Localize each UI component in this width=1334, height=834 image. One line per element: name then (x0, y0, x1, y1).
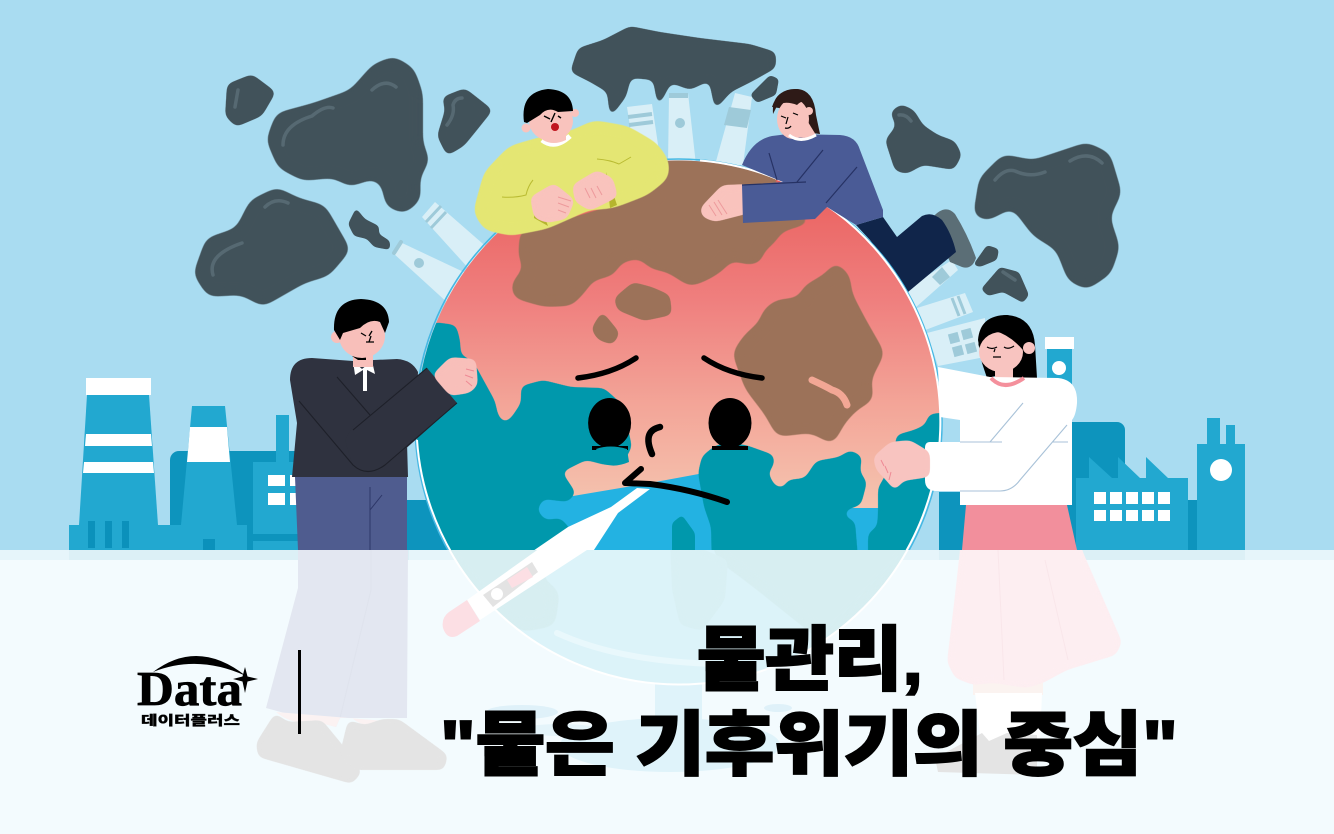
logo arc (153, 656, 246, 676)
logo: Data Plus (137, 656, 258, 728)
collar (353, 361, 375, 391)
mouth (625, 469, 727, 502)
legs (295, 477, 407, 550)
eyes (588, 398, 752, 449)
head (331, 299, 389, 367)
divider line (298, 650, 301, 734)
right factories (939, 337, 1245, 550)
nose (648, 427, 660, 454)
faded skirt, legs and shoes of woman (936, 550, 1120, 774)
teal under eyes (596, 446, 629, 466)
sick face on the globe (578, 358, 762, 466)
hand (432, 357, 478, 396)
skirt (962, 505, 1077, 550)
logo star (233, 667, 258, 693)
smoke clouds (193, 26, 1122, 307)
head (772, 89, 820, 140)
faded globe lower half (448, 550, 908, 686)
logo wordmark: Data (137, 661, 242, 716)
person in yellow sweater (473, 89, 669, 236)
thermometer upper part (530, 488, 650, 553)
faded lower band (0, 550, 1334, 834)
sleeve (925, 420, 1072, 491)
neck and face (978, 315, 1035, 390)
woman on the right (873, 315, 1077, 550)
head (522, 89, 579, 144)
eyebrows (578, 358, 762, 378)
left factories (69, 378, 460, 550)
faded stand and base of globe (486, 680, 792, 772)
logo Korean wordmark: 데이터플러스 (141, 713, 240, 728)
sweater (938, 367, 1077, 505)
back hair (978, 315, 1037, 387)
title line 1: 물관리, (697, 621, 923, 699)
hand (873, 440, 930, 491)
small chimneys around the globe (393, 93, 985, 366)
person in blue sweater (700, 89, 883, 225)
person behind globe: leg and shoe (856, 209, 976, 292)
faded trousers and shoes of man (256, 550, 448, 784)
water and continents (400, 140, 950, 575)
title (440, 621, 1178, 784)
man on the left (290, 299, 478, 550)
title line 2: "물은 기후위기의 중심" (440, 706, 1178, 784)
globe (414, 158, 943, 550)
thermometer display (483, 562, 538, 607)
thermometer cap (443, 600, 480, 637)
thermometer lower part (443, 548, 590, 637)
sweater (290, 358, 418, 477)
